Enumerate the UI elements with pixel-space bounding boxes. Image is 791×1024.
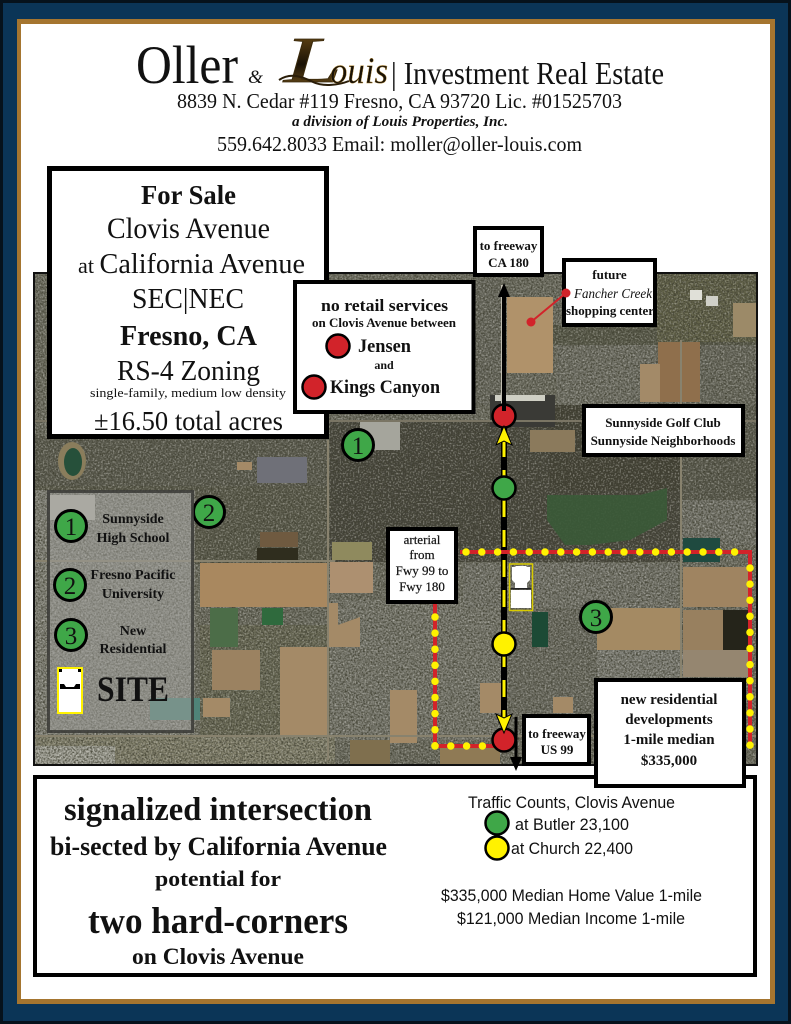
south residential [35,490,195,740]
callout: to freeway US 99 [524,716,589,764]
icon: site parcels [510,564,532,610]
brand name Oller: Oller [136,35,238,95]
map marker 1 [342,430,374,460]
legend label: Sunnyside High School: Sunnyside [102,512,164,527]
callout: arterial: Fwy 99 to [396,563,448,578]
median income: $121,000 Median Income 1-mile [457,909,685,928]
arrow: yellow down [496,714,512,733]
traffic counts heading: Traffic Counts, Clovis Avenue [468,793,675,812]
callout: to freeway CA 180: CA 180 [488,255,529,270]
legend marker 2 [54,570,86,600]
callout: Sunnyside Golf Club: Sunnyside Golf Club [605,415,721,430]
legend label: SITE: SITE [97,669,169,709]
heading: For Sale: For Sale [141,180,236,210]
headline: two hard-corners: two hard-corners [88,901,348,942]
label: Jensen: Jensen [358,336,411,357]
zoning description: single-family, medium low density [90,385,287,400]
map marker 2: 2 [203,500,215,527]
phone and email: 559.642.8033 Email: moller@oller-louis.com [217,132,582,156]
callout: arterial: from [409,547,435,562]
fields [200,563,327,607]
icon: yellow traffic key [486,836,508,860]
callout: arterial: Fwy 180 [399,579,445,594]
legend marker 1 [56,510,86,542]
headline: bi-sected: bi-sected by California Avenue [50,832,387,861]
label: Kings Canyon: Kings Canyon [330,377,440,398]
callout: to freeway US 99: US 99 [541,742,574,757]
brand name Louis: L [282,24,342,97]
map marker 1: 1 [352,433,364,460]
label: and: and [374,358,394,372]
city: Fresno, CA [120,320,257,352]
company header [136,24,664,156]
divider and tagline: | Investment Real Estate [391,55,664,91]
icon: green traffic count marker [492,476,516,500]
panel: property summary [50,168,326,436]
legend marker 3: 3 [65,623,77,650]
north tree canopy areas [35,484,335,564]
callout subheading: on Clovis Avenue between [312,315,457,330]
callout: to freeway CA 180: to freeway [480,238,538,253]
acreage: ±16.50 total acres [94,406,283,436]
callout: arterial [388,529,456,602]
map marker 3 [580,602,612,632]
cross street: at California Avenue [78,249,305,280]
zoning: RS-4 Zoning [117,356,260,387]
callout: Sunnyside Golf Club: Sunnyside Neighborhoods [591,433,735,448]
legend label: Fresno Pacific University: Fresno Pacific [91,568,175,583]
address: 8839 N. Cedar #119 Fresno, CA 93720 Lic. #01525703 [177,89,622,113]
aerial map [33,272,758,766]
road: Clovis Avenue segment with yellow dashes [501,428,507,732]
ampersand: & [248,67,263,88]
legend marker 2: 2 [64,573,76,600]
legend-side light patches under the legend [50,495,95,520]
arrow: black down to US 99 [510,717,522,771]
map marker 2 [194,496,224,528]
legend icon: site [58,668,82,713]
legend marker 3 [56,620,86,650]
icon: red signal north (Kings Canyon) [492,404,516,428]
headline: signalized intersection: signalized intersection [64,792,372,828]
icon: red marker Jensen [326,334,350,358]
legend marker 1: 1 [65,514,77,541]
traffic count: Butler: at Butler 23,100 [515,815,629,834]
callout: no retail services [295,282,474,412]
legend label: Sunnyside High School: High School [97,531,169,546]
icon: red signal south (Jensen) [492,728,516,752]
callout: future Fancher Creek shopping center: Fancher Creek [573,287,653,302]
icon: green traffic key [486,812,508,834]
pointer: Fancher Creek site [526,288,570,326]
division line: a division of Louis Properties, Inc. [292,114,508,130]
callout: Sunnyside Golf Club [584,406,743,455]
map marker 3: 3 [590,605,602,632]
panel: bottom summary [35,777,755,975]
callout: future Fancher Creek shopping center: shopping center [566,303,654,318]
median home value: $335,000 Median Home Value 1-mile [441,886,702,905]
brand name Louis [279,24,388,97]
callout: to freeway US 99: to freeway [528,726,586,741]
corners: SEC|NEC [132,284,244,315]
callout: new residential developments: 1-mile median [623,732,715,748]
callout heading: no retail services [321,296,448,315]
text: on Clovis Avenue: on Clovis Avenue [132,944,304,969]
traffic count: Church: at Church 22,400 [511,839,633,858]
text: potential for: potential for [155,866,281,891]
panel: map legend [48,492,192,732]
callout: future Fancher Creek shopping center [564,260,655,325]
street name: Clovis Avenue [107,212,270,245]
callout: new residential developments: new residential [621,692,717,708]
callout: to freeway CA 180 [475,228,542,275]
icon: red marker Kings Canyon [302,376,326,398]
dotted boundary: new residential area [435,552,750,746]
callout: new residential developments: $335,000 [641,753,697,769]
arrow: yellow up [496,426,512,445]
legend label: Fresno Pacific University: University [102,587,164,602]
callout: arterial: arterial [404,532,441,547]
legend label: New Residential: New [120,624,147,639]
legend label: New Residential: Residential [100,642,167,657]
brand name Louis: ouis [330,51,388,92]
road: Clovis Avenue north arrow to CA 180 [498,283,510,411]
callout: new residential developments: developments [625,712,713,728]
callout: new residential developments [596,680,744,786]
icon: yellow traffic count marker [492,632,516,656]
callout: future Fancher Creek shopping center: future [592,267,627,282]
